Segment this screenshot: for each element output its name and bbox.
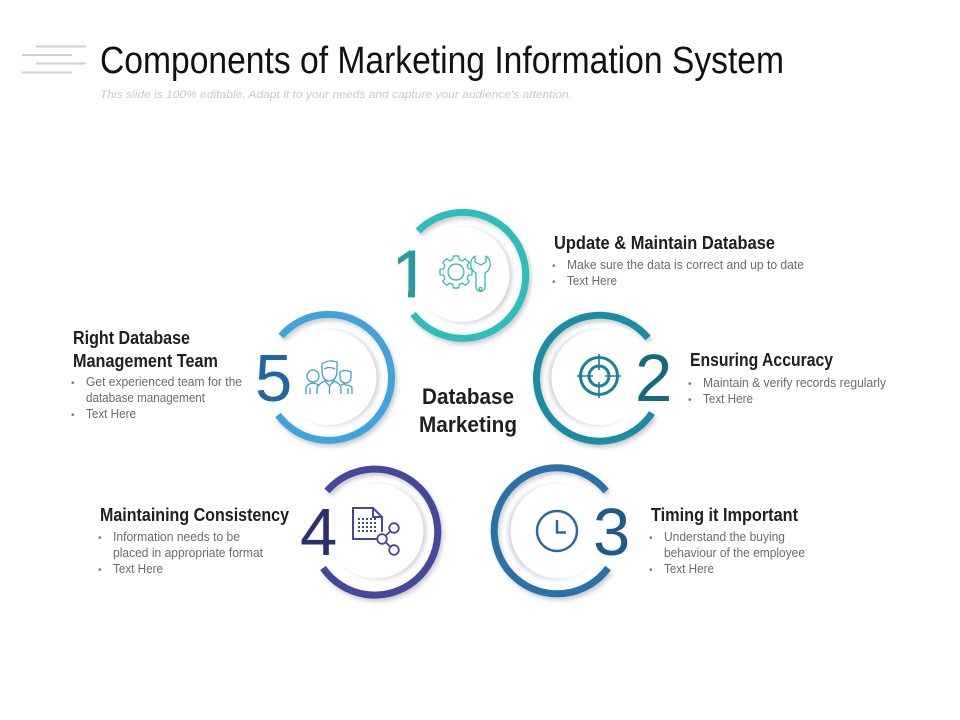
step 5 text: Right Database <box>73 328 190 348</box>
centre label: Database Marketing <box>419 384 517 437</box>
infographic canvas <box>22 46 886 604</box>
step 5 text <box>71 328 242 421</box>
step 2 text: • <box>688 395 692 406</box>
step 2 text: Text Here <box>703 392 753 406</box>
step 1 text: • <box>552 277 556 288</box>
step 1 text: Make sure the data is correct and up to date <box>567 258 804 272</box>
step 1 ring <box>413 212 526 338</box>
step 4 text: • <box>98 565 102 576</box>
step 4 number: 4 <box>300 495 337 570</box>
step 5 number: 5 <box>255 341 292 416</box>
step 4 text <box>98 505 289 576</box>
step 4 text: • <box>98 533 102 544</box>
step 4 text: Maintaining Consistency <box>100 505 289 525</box>
centre label: Database Marketing: Marketing <box>419 412 517 437</box>
step 5 text: Text Here <box>86 407 136 421</box>
subtitle: This slide is 100% editable. Adapt it to your needs and capture your audience's attention. <box>100 89 572 101</box>
icon: gear and wrench <box>440 256 490 291</box>
title: Components of Marketing Information System <box>100 40 784 82</box>
step 3 text: • <box>649 533 653 544</box>
step 1 text: Text Here <box>567 274 617 288</box>
step 5 text: Management Team <box>73 351 218 371</box>
step 2 text: Ensuring Accuracy <box>690 350 833 370</box>
step 3 text: behaviour of the employee <box>664 546 805 560</box>
step 5 text: Get experienced team for the <box>86 375 242 389</box>
step 2 text <box>688 350 887 406</box>
step 5 text: database management <box>86 391 205 405</box>
step 3 text: Text Here <box>664 562 714 576</box>
step 1 text <box>552 233 804 288</box>
step 1 text: • <box>552 261 556 272</box>
centre label: Database Marketing: Database <box>422 384 514 409</box>
step 4 ring <box>323 469 438 595</box>
step 2 text: Maintain & verify records regularly <box>703 376 887 390</box>
icon: document with network <box>353 508 399 555</box>
step 4 text: Text Here <box>113 562 163 576</box>
step 3 text: Timing it Important <box>651 505 798 525</box>
step 3 ring <box>494 468 608 594</box>
header decoration lines <box>22 46 86 72</box>
step 5 text: • <box>71 378 75 389</box>
step 2 number: 2 <box>635 341 672 416</box>
step 3 text: • <box>649 565 653 576</box>
icon: clock <box>537 511 577 551</box>
step 5 text: • <box>71 410 75 421</box>
step 4 text: placed in appropriate format <box>113 546 263 560</box>
step 1 number: 1 <box>392 237 429 312</box>
step 2 ring <box>536 315 652 441</box>
step 5 ring <box>278 314 392 440</box>
step 4 text: Information needs to be <box>113 530 240 544</box>
step 2 text: • <box>688 379 692 390</box>
icon: team of people <box>306 361 352 394</box>
step 3 number: 3 <box>593 495 630 570</box>
step 1 text: Update & Maintain Database <box>554 233 775 253</box>
step 3 text: Understand the buying <box>664 530 785 544</box>
icon: target <box>577 354 621 398</box>
step 3 text <box>649 505 805 576</box>
